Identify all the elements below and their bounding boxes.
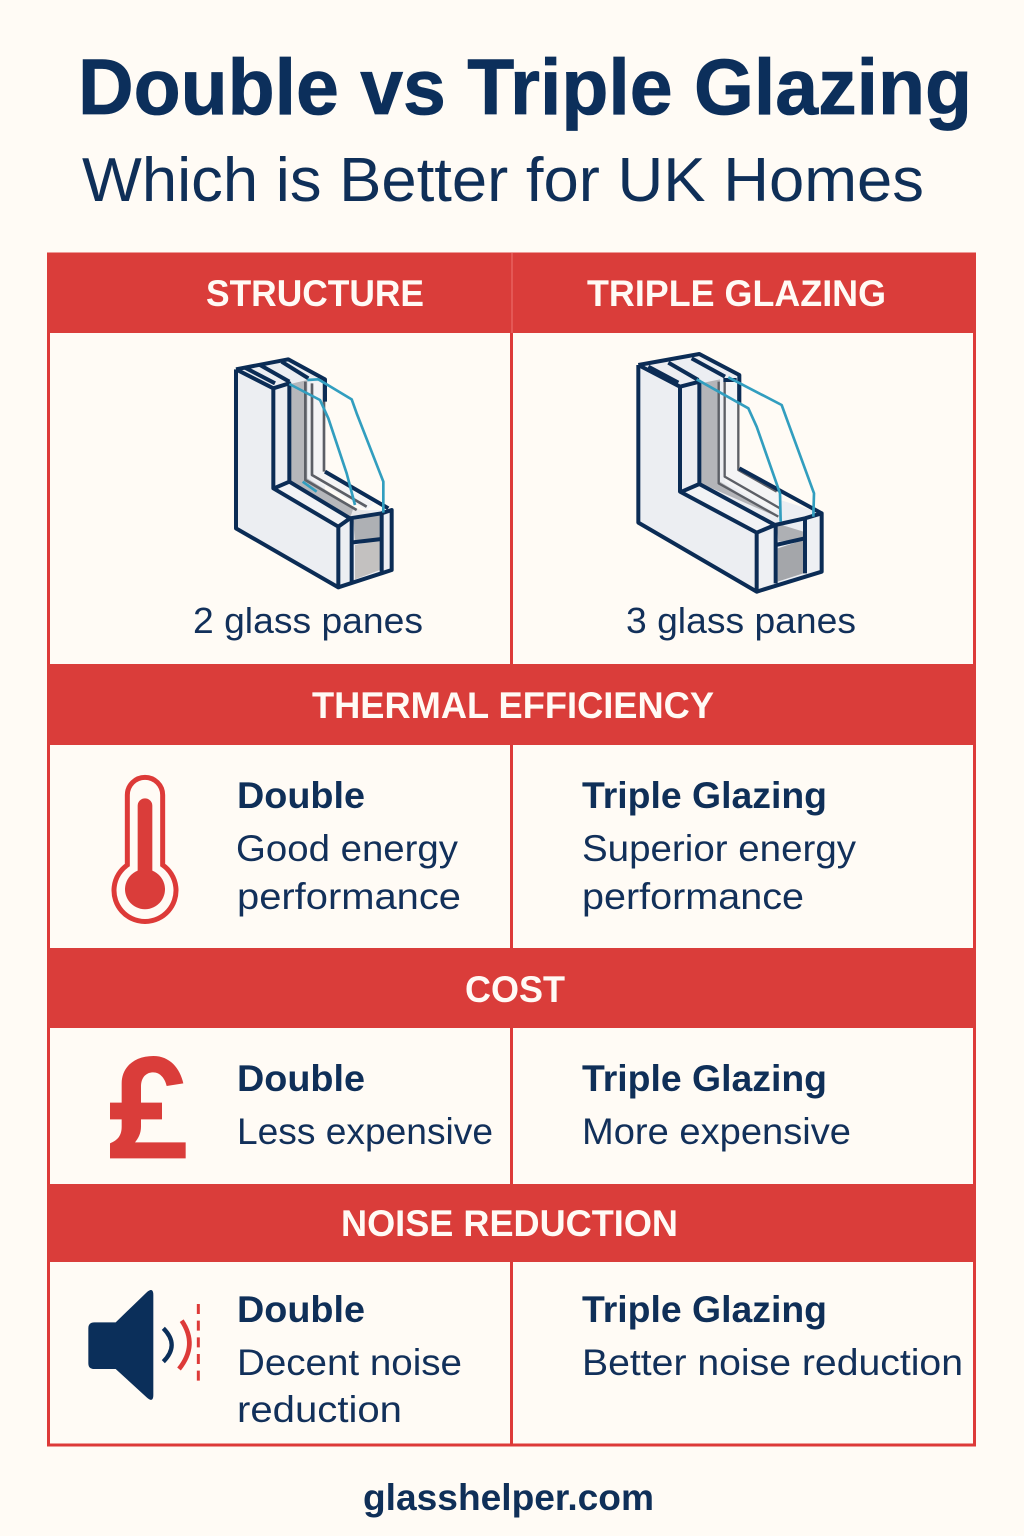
icon: thermometer — [114, 777, 176, 921]
cost: triple text: Triple Glazing — [582, 1058, 827, 1099]
header band: structure and triple glazing — [47, 253, 976, 333]
thermal: triple text: performance — [582, 876, 804, 917]
icon: pound sign — [110, 1056, 186, 1158]
header band: cost — [47, 948, 976, 1028]
header band: structure and triple glazing: TRIPLE GLAZING — [587, 273, 886, 314]
comparison table frame — [48, 254, 974, 1445]
cost: double text — [237, 1058, 493, 1152]
subtitle: Which is Better for UK Homes — [82, 146, 924, 215]
cost: double text: Less expensive — [237, 1111, 493, 1152]
icon: speaker — [88, 1290, 198, 1400]
header band: thermal efficiency — [47, 664, 976, 745]
noise: double text: reduction — [237, 1389, 402, 1430]
thermal: double text: Good energy — [236, 828, 459, 869]
thermal: triple text — [582, 775, 857, 917]
caption: 3 glass panes: 3 glass panes — [626, 600, 856, 641]
icon: double glazing window section — [236, 359, 392, 588]
header band: structure and triple glazing: STRUCTURE — [206, 273, 424, 314]
thermal: double text: performance — [237, 876, 461, 917]
thermal: triple text: Triple Glazing — [582, 775, 827, 816]
noise: triple text — [582, 1289, 963, 1383]
cost: triple text: More expensive — [582, 1111, 851, 1152]
thermal: double text — [236, 775, 461, 917]
noise: double text: Decent noise — [237, 1342, 462, 1383]
header band: cost: COST — [465, 969, 565, 1010]
noise: double text: Double — [237, 1289, 365, 1330]
icon: triple glazing window section — [638, 354, 822, 592]
header band: thermal efficiency: THERMAL EFFICIENCY — [312, 685, 714, 726]
footer website: glasshelper.com — [363, 1477, 654, 1518]
noise: triple text: Triple Glazing — [582, 1289, 827, 1330]
cost: triple text — [582, 1058, 851, 1152]
title: Double vs Triple Glazing — [78, 42, 972, 131]
thermal: triple text: Superior energy — [582, 828, 857, 869]
header band: noise reduction — [47, 1184, 976, 1262]
cost: double text: Double — [237, 1058, 365, 1099]
thermal: double text: Double — [237, 775, 365, 816]
noise: triple text: Better noise reduction — [582, 1342, 963, 1383]
noise: double text — [237, 1289, 462, 1430]
caption: 2 glass panes: 2 glass panes — [193, 600, 423, 641]
header band: noise reduction: NOISE REDUCTION — [341, 1203, 678, 1244]
